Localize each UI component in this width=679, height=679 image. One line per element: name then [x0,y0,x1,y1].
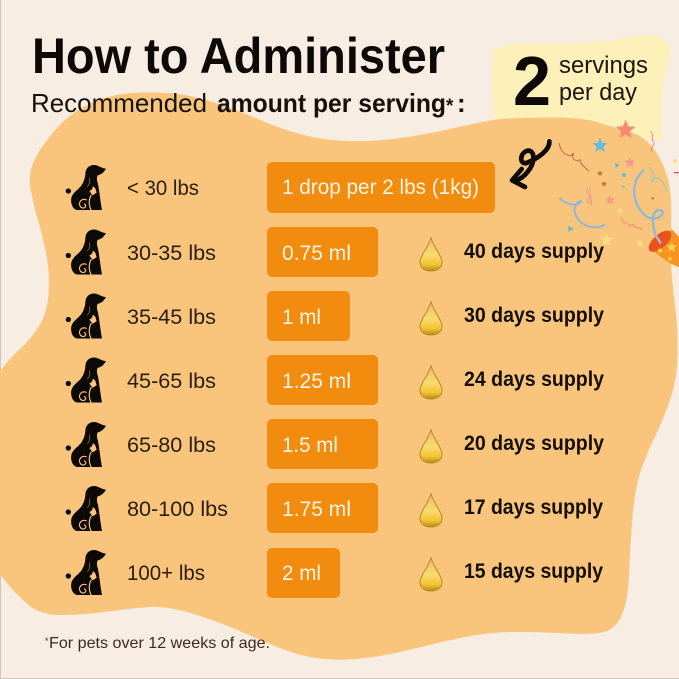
dose pill [267,355,378,405]
icon: dog and cat [66,422,106,468]
footnote: For pets over 12 weeks of age. [49,635,270,652]
dose pill: 1.75 ml [282,498,351,521]
dose pill: 1.5 ml [282,434,338,457]
subtitle: amount per serving [217,88,446,118]
weight label: 80-100 lbs [127,498,228,521]
icon: oil drop [420,366,442,399]
callout label: servings [559,52,648,79]
supply label: 15 days supply [464,560,603,583]
dose pill [267,548,340,598]
weight label: 35-45 lbs [127,306,216,329]
supply label: 17 days supply [464,496,603,519]
dose pill [267,162,495,213]
dose pill: 1.25 ml [282,370,351,393]
supply label: 20 days supply [464,432,604,455]
dose pill [267,291,350,341]
subtitle: : [457,88,466,118]
dose pill: 1 drop per 2 lbs (1kg) [282,176,479,199]
weight label: 100+ lbs [127,562,205,585]
row: 100+ lbs [66,548,603,598]
footnote: * [45,636,49,646]
row: 80-100 lbs [66,483,603,533]
icon: oil drop [420,302,442,335]
dose pill [267,227,378,277]
row: 65-80 lbs [66,419,604,469]
supply label: 40 days supply [464,240,604,263]
dose pill: 0.75 ml [282,242,351,265]
dose pill [267,419,378,469]
dose pill: 2 ml [282,562,321,585]
icon: dog and cat [66,486,106,532]
icon: dog and cat [66,229,106,275]
row: 45-65 lbs [66,355,604,405]
weight label: 65-80 lbs [127,434,216,457]
row: under 30 lbs [66,162,495,213]
icon: oil drop [420,430,442,463]
icon: dog and cat [66,550,106,596]
callout: 2 servings per day [513,42,648,120]
subtitle: * [446,96,454,117]
dose pill: 1 ml [282,306,321,329]
icon: party popper [645,227,679,267]
icon: dog and cat [66,165,106,211]
confetti illustration [559,120,679,267]
row: 30-35 lbs [66,227,604,277]
weight label: < 30 lbs [127,177,199,200]
supply label: 30 days supply [464,304,604,327]
yellow callout background [492,35,670,140]
icon: curly arrow [512,141,549,187]
weight label: 30-35 lbs [127,242,216,265]
title: How to Administer [32,28,445,84]
subtitle: Recommended [31,88,207,118]
supply label: 24 days supply [464,368,604,391]
weight label: 45-65 lbs [127,370,216,393]
callout label: per day [559,79,637,106]
row: 35-45 lbs [66,291,604,341]
icon: oil drop [420,494,442,527]
dose pill [267,483,378,533]
icon: dog and cat [66,293,106,339]
icon: dog and cat [66,357,106,403]
icon: oil drop [420,558,442,591]
icon: oil drop [420,238,442,271]
callout number: 2 [513,42,551,120]
